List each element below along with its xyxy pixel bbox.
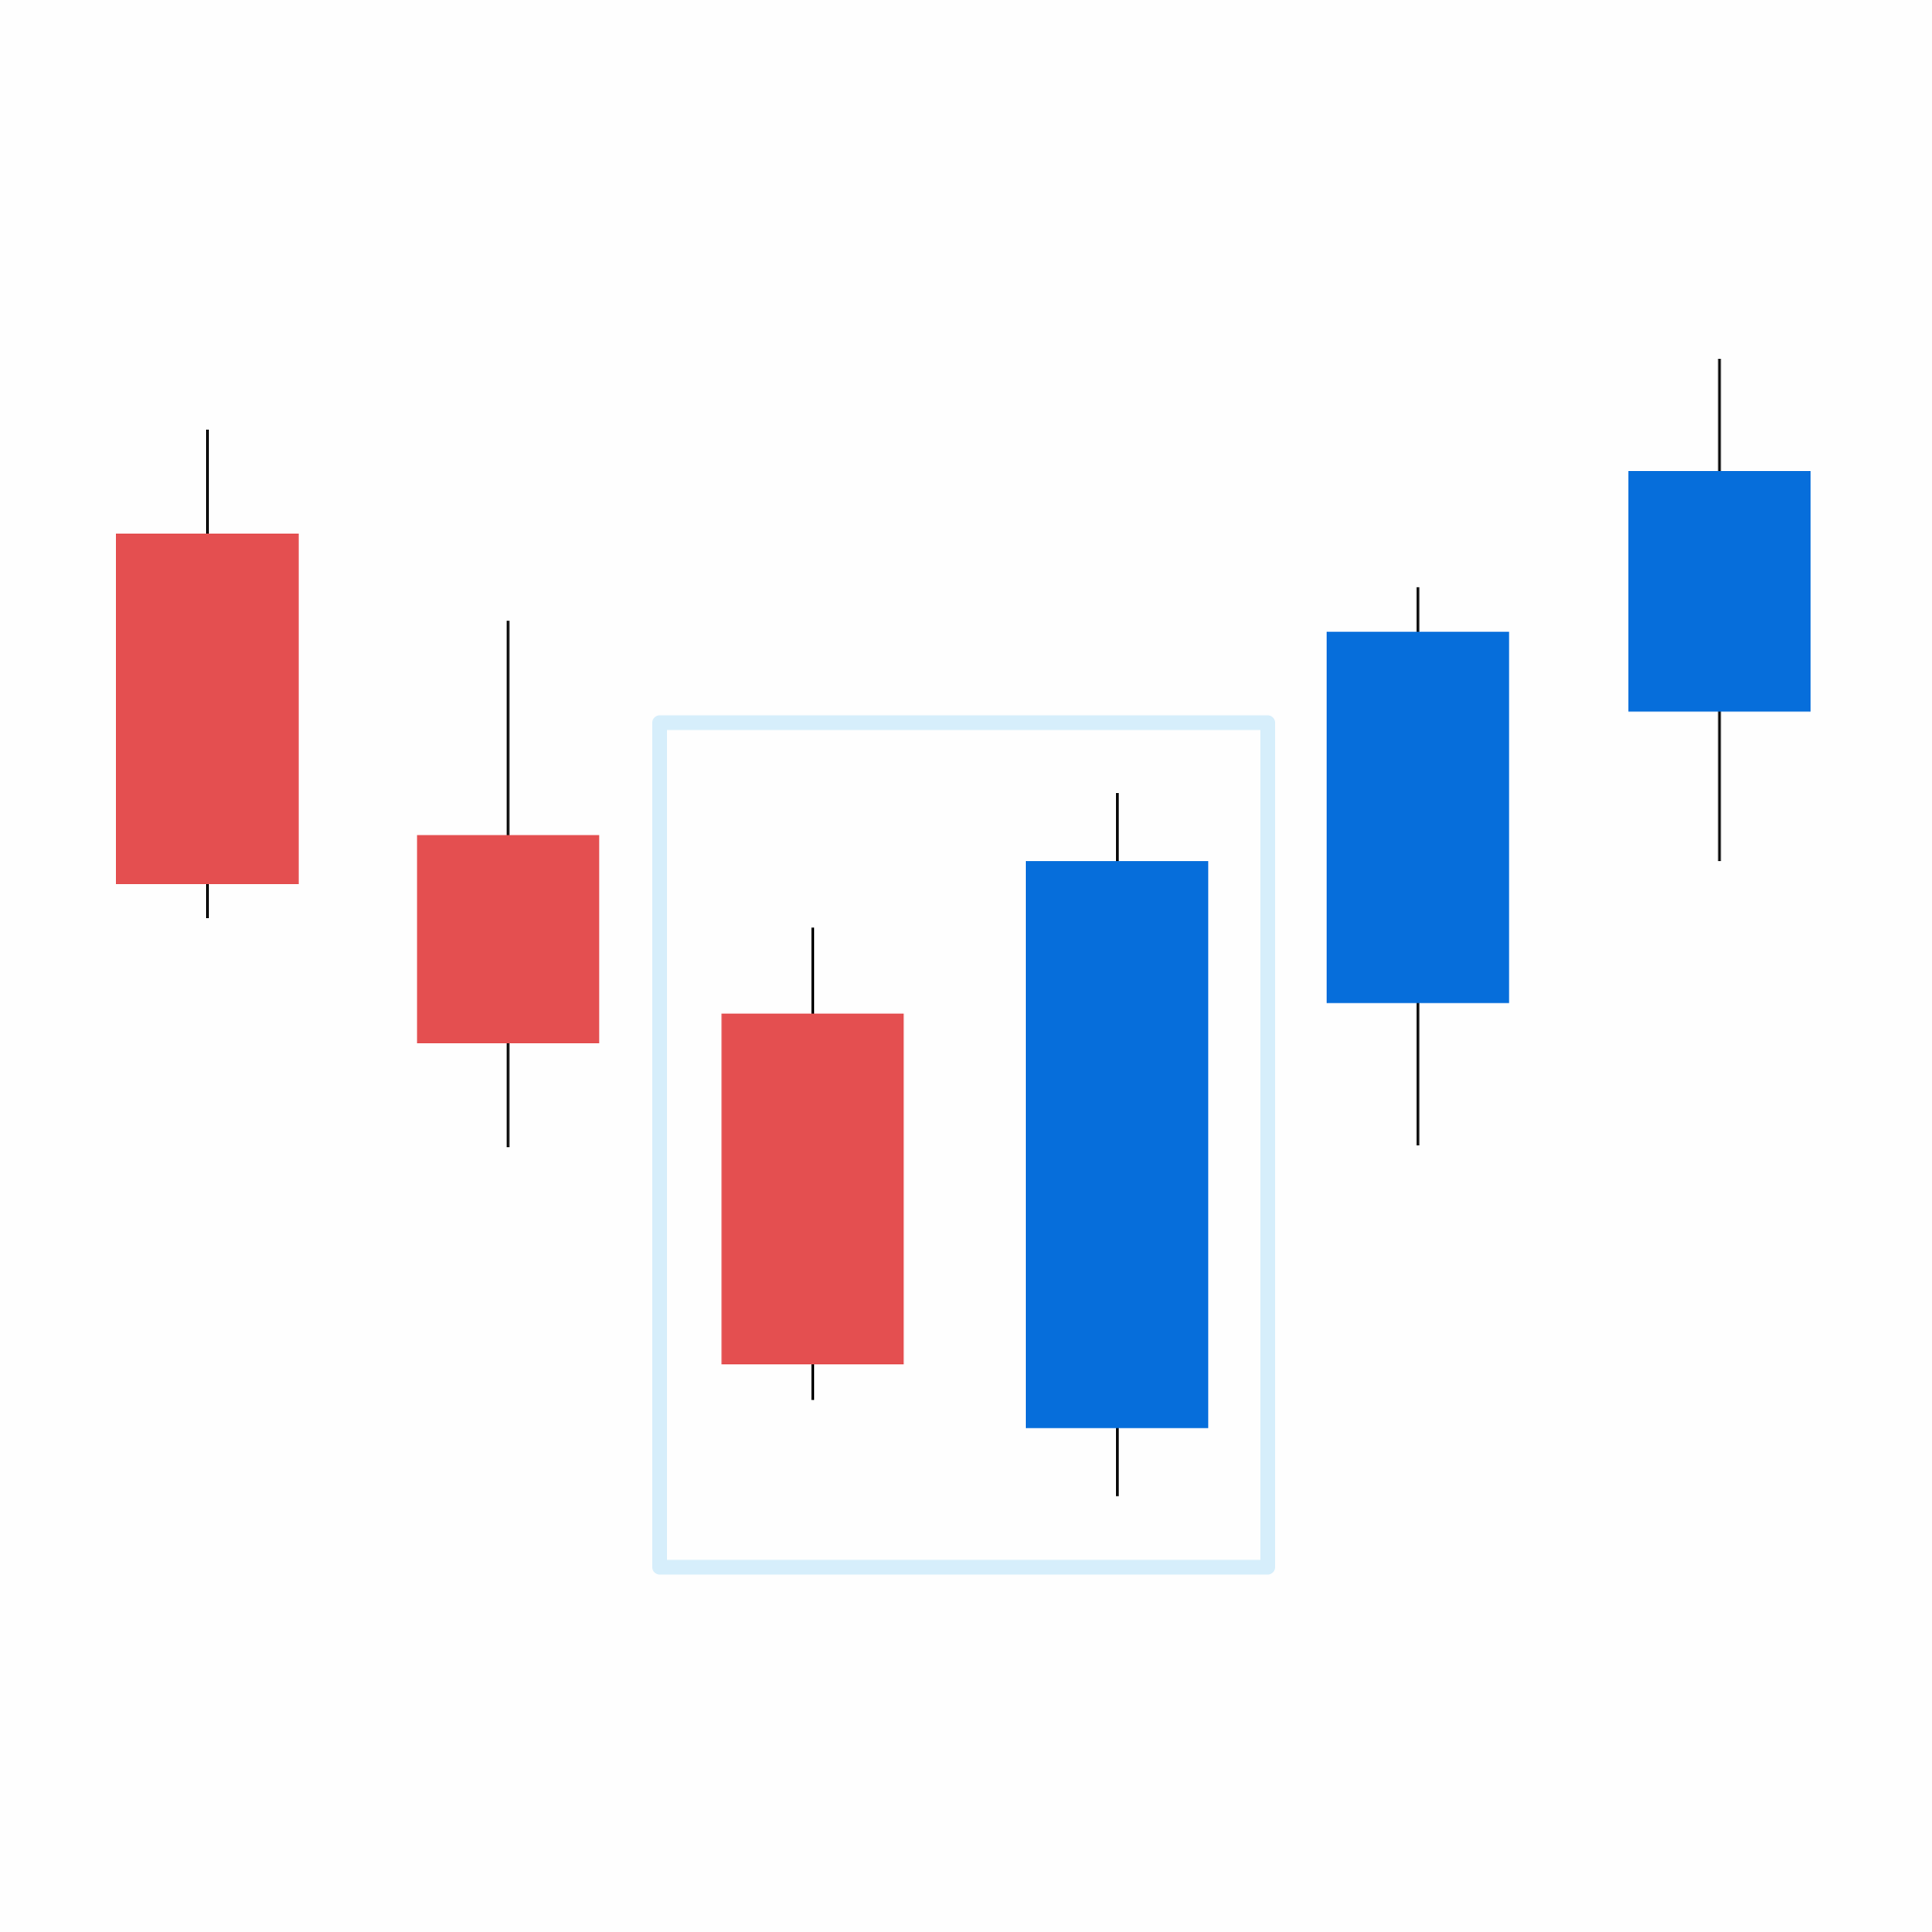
highlight frame around the two-candle pattern — [660, 723, 1268, 1568]
candle 2: red bearish — [417, 621, 599, 1147]
candle 1: red bearish — [116, 430, 299, 918]
candle 3: red bearish inside frame — [721, 927, 903, 1400]
candle 5: blue bullish — [1327, 587, 1509, 1145]
candle 6: blue bullish — [1628, 359, 1811, 861]
candle 4: blue bullish engulfing inside frame — [1026, 793, 1208, 1496]
